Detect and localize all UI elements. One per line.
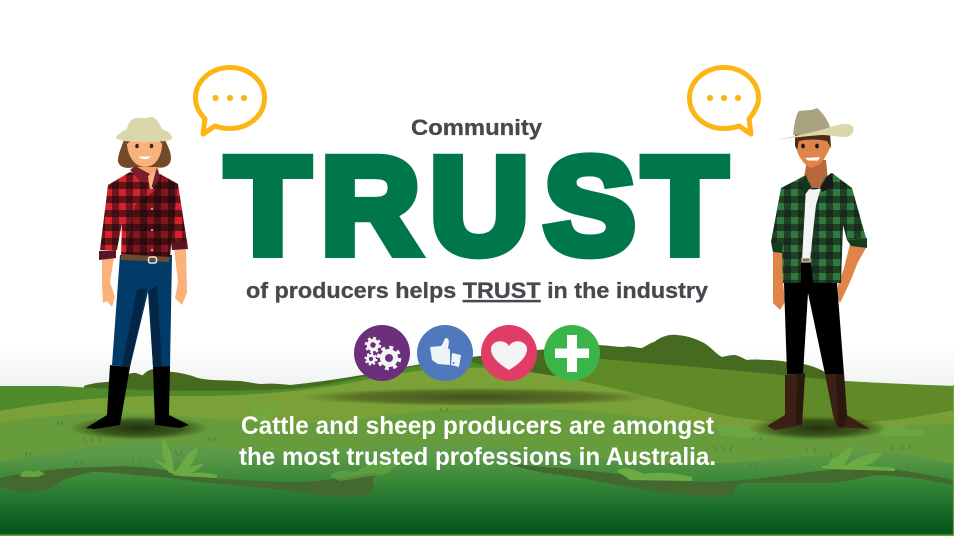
central olive hill bbox=[0, 368, 954, 536]
hair bbox=[118, 134, 171, 168]
icon: plus bbox=[544, 325, 600, 381]
icon: thumbs up bbox=[417, 325, 473, 381]
distant dark hills bbox=[84, 335, 860, 420]
boots bbox=[86, 365, 130, 429]
grass ticks bbox=[12, 408, 919, 477]
ground shadow under icons bbox=[301, 388, 651, 406]
undershirt strip bbox=[801, 262, 813, 283]
left field bbox=[0, 360, 700, 460]
cuffs bbox=[771, 242, 783, 253]
caption: Cattle and sheep producers are amongst bbox=[241, 412, 715, 440]
grass tufts bbox=[20, 388, 925, 481]
collar bbox=[820, 173, 834, 192]
trousers bbox=[112, 255, 172, 367]
front gradient field bbox=[0, 443, 954, 536]
mid field bbox=[0, 408, 954, 536]
neck bbox=[804, 160, 828, 195]
landscape background bbox=[0, 335, 954, 536]
shirt bbox=[771, 173, 856, 283]
heading: TRUST: TRUST bbox=[226, 130, 727, 283]
collar bbox=[130, 166, 150, 183]
hat bbox=[116, 117, 172, 142]
face bbox=[127, 137, 162, 167]
speech bubble left bbox=[196, 68, 264, 134]
heading: Community: Community bbox=[411, 115, 543, 140]
dark wavy band right bbox=[505, 463, 954, 497]
big tuft right bbox=[822, 447, 895, 471]
speech bubble right bbox=[690, 68, 758, 134]
belt bbox=[121, 254, 170, 262]
face bbox=[795, 134, 831, 168]
arms bbox=[773, 250, 785, 310]
cuffs bbox=[99, 250, 116, 260]
caption bbox=[239, 412, 716, 471]
right field bbox=[520, 358, 954, 470]
dark wavy band left bbox=[0, 466, 378, 497]
character: woman farmer bbox=[69, 117, 209, 440]
caption: the most trusted professions in Australia. bbox=[239, 443, 716, 471]
big tuft left bbox=[154, 438, 217, 478]
subheading: of producers helps TRUST in the industry bbox=[246, 278, 709, 303]
trousers bbox=[784, 283, 844, 374]
character: man farmer bbox=[748, 108, 888, 440]
shirt bbox=[100, 172, 178, 257]
boots bbox=[767, 373, 805, 430]
hat bbox=[793, 108, 830, 135]
arms bbox=[102, 258, 115, 307]
icon: heart bbox=[481, 325, 537, 381]
neck bbox=[131, 160, 160, 198]
white tee bbox=[802, 188, 821, 260]
buttons bbox=[151, 187, 153, 251]
icon: gears bbox=[354, 325, 410, 381]
